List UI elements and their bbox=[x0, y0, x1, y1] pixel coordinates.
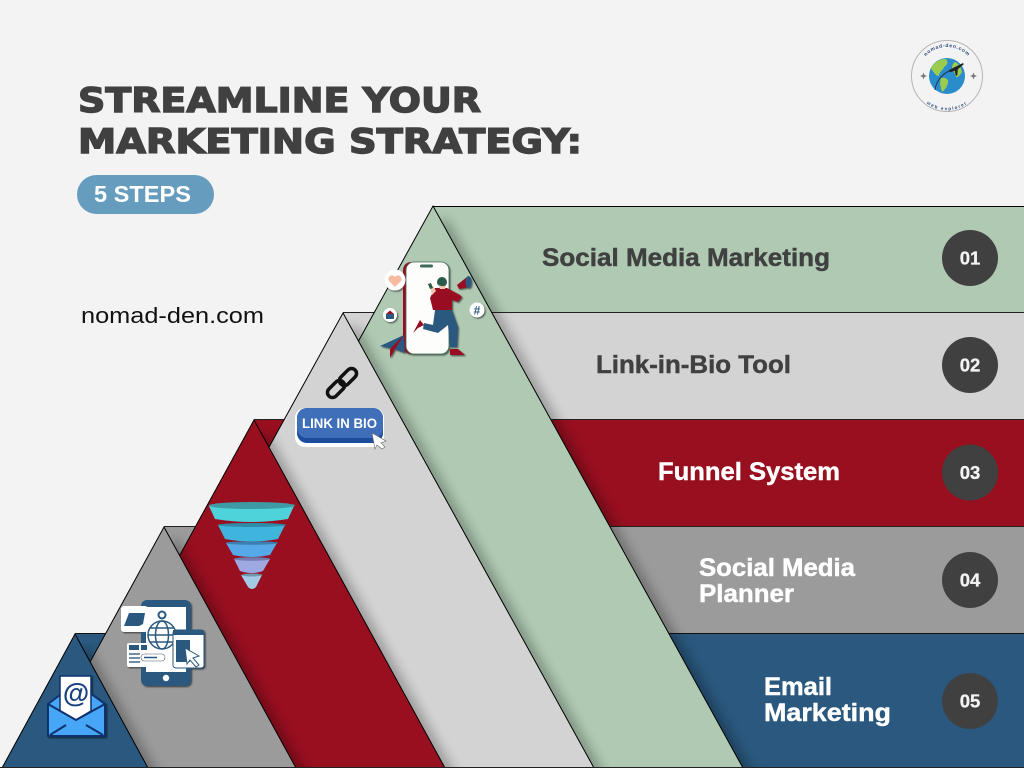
triangle: step 1 green bbox=[123, 206, 751, 768]
icon: sales funnel bbox=[209, 502, 295, 589]
badge: 5 steps bbox=[77, 175, 214, 214]
title: MARKETING STRATEGY: bbox=[78, 122, 582, 162]
step 2 band: Link-in-Bio Tool: 02 bbox=[960, 354, 980, 376]
logo: globe badge: web explorer bbox=[927, 102, 966, 112]
triangle: step 3 red bbox=[63, 420, 453, 768]
step 3 band: Funnel System: 03 bbox=[960, 462, 980, 483]
triangle: step 5 blue bbox=[2, 634, 156, 768]
bubble: heart bbox=[384, 270, 406, 290]
icon: phone with marketer bbox=[380, 262, 484, 358]
icon: chain link bbox=[325, 366, 359, 400]
step 4 band: Social Media Planner: Planner bbox=[699, 580, 794, 608]
bottom edge bbox=[0, 766, 1024, 768]
step 5 band: Email Marketing bbox=[75, 633, 1024, 768]
step 1 band: Social Media Marketing: Social Media Marketing bbox=[542, 244, 830, 272]
title bbox=[78, 81, 582, 162]
button: link in bio bbox=[295, 408, 386, 449]
step 5 band: Email Marketing: Marketing bbox=[764, 699, 891, 727]
icon: paper plane bbox=[380, 335, 405, 358]
triangle: step 2 light grey bbox=[92, 313, 602, 768]
icon: email envelope bbox=[48, 676, 105, 736]
phone bbox=[403, 262, 449, 354]
badge: 5 steps: 5 STEPS bbox=[94, 181, 191, 207]
triangle: step 4 grey bbox=[32, 527, 304, 768]
step 4 band: Social Media Planner: Social Media bbox=[699, 554, 856, 582]
step 3 band: Funnel System: Funnel System bbox=[658, 458, 840, 486]
logo: globe badge bbox=[911, 40, 983, 112]
step 5 band: Email Marketing: 05 bbox=[960, 690, 980, 712]
title: STREAMLINE YOUR bbox=[78, 81, 481, 121]
logo: globe badge: nomad-den.com bbox=[924, 43, 970, 56]
bubble: mail bbox=[383, 308, 397, 322]
step 1 band: Social Media Marketing bbox=[433, 206, 1024, 313]
website url: nomad-den.com bbox=[81, 303, 264, 328]
icon: email envelope: @ bbox=[63, 678, 89, 708]
button: link in bio: LINK IN BIO bbox=[302, 416, 377, 431]
step 5 band: Email Marketing: Email bbox=[764, 673, 832, 701]
marketer figure bbox=[413, 276, 472, 355]
bubble: hashtag: # bbox=[474, 304, 481, 318]
step 3 band: Funnel System bbox=[254, 419, 1024, 527]
icon: devices and web bbox=[121, 600, 204, 686]
step 2 band: Link-in-Bio Tool: Link-in-Bio Tool bbox=[596, 351, 791, 379]
step 1 band: Social Media Marketing: 01 bbox=[960, 248, 980, 268]
step 4 band: Social Media Planner: 04 bbox=[960, 570, 981, 590]
step 2 band: Link-in-Bio Tool bbox=[343, 312, 1024, 420]
step 4 band: Social Media Planner bbox=[164, 526, 1024, 634]
